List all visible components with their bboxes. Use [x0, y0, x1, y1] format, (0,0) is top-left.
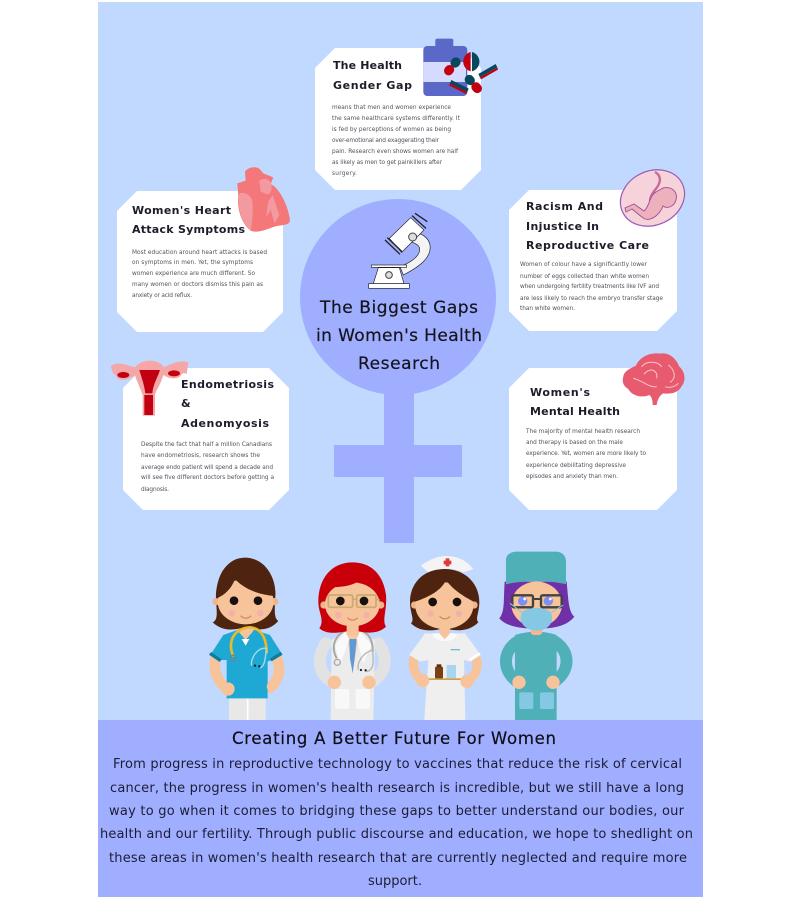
text: health gender gap body: is fed by perceptions of women as being [332, 127, 451, 133]
text: footer body: support. [368, 874, 422, 889]
text: endometriosis body: average endo patient will spend a decade and [141, 465, 273, 471]
heading: endometriosis: Endometriosis [181, 378, 274, 391]
text: mental health body: experience debilitating depressive [526, 463, 626, 469]
central female symbol [300, 199, 496, 543]
icon: brain [623, 353, 685, 405]
text: racism body: are less likely to reach the embryo transfer stage [520, 296, 663, 302]
text: mental health body [525, 429, 646, 480]
text: footer body: health and our fertility. Through public discourse and education, we hope to shedlight on [100, 827, 693, 842]
heading: central title [316, 298, 482, 374]
heading: endometriosis: & [181, 397, 191, 410]
heading: racism and injustice: Racism And [526, 200, 603, 213]
text: health gender gap body: the same healthcare systems differently. It [332, 116, 461, 122]
text: racism body: number of eggs collected than white women [520, 274, 649, 280]
text: endometriosis body: have endometriosis, research shows the [141, 453, 260, 459]
text: footer body: From progress in reproductive technology to vaccines that reduce the risk of cervical [113, 757, 682, 772]
text: mental health body: and therapy is based on the male [526, 440, 623, 446]
text: heart attack body [132, 250, 267, 299]
heading: health gender gap [333, 59, 412, 92]
panel: women's heart attack symptoms [117, 191, 283, 332]
panel: endometriosis and adenomyosis [123, 368, 289, 510]
character: nurse [409, 556, 481, 720]
heading: racism and injustice: Reproductive Care [526, 239, 649, 252]
text: footer body: cancer, the progress in women's health research is incredible, but we still have a long [110, 781, 684, 796]
icon: anatomical heart [237, 167, 290, 232]
heading: footer title: Creating A Better Future For Women [232, 729, 556, 748]
heading: health gender gap: The Health [333, 59, 402, 72]
text: endometriosis body: will see five different doctors before getting a [141, 475, 274, 481]
heading: central title: The Biggest Gaps [319, 298, 478, 318]
text: footer body: these areas in women's health research that are currently neglected and require more [109, 851, 687, 866]
text: health gender gap body: pain. Research even shows women are half [332, 149, 459, 155]
heading: heart attack symptoms: Women's Heart [132, 204, 231, 217]
page background panel [98, 2, 703, 720]
text: racism body: when undergoing fertility treatments like IVF and [520, 284, 659, 290]
panel: women's mental health [509, 368, 677, 510]
heading: heart attack symptoms: Attack Symptoms [132, 223, 245, 236]
heading: endometriosis: Adenomyosis [181, 417, 269, 430]
icon: medicine bottle and pills [423, 39, 498, 96]
panel: racism and injustice [509, 190, 677, 331]
panel: the health gender gap [315, 48, 481, 190]
icon: microscope [369, 213, 430, 288]
text: mental health body: experience. Yet, women are more likely to [526, 451, 646, 457]
heading: mental health [530, 386, 620, 418]
panel: creating a better future [98, 720, 703, 897]
text: health gender gap body: means that men and women experience [332, 105, 451, 111]
text: heart attack body: Most education around heart attacks is based [132, 250, 267, 256]
text: health gender gap body: as likely as men to get painkillers after [332, 160, 443, 166]
text: mental health body: The majority of mental health research [525, 429, 640, 435]
heading: heart attack symptoms [132, 204, 245, 236]
character: doctor in blue scrubs [210, 558, 282, 720]
text: health gender gap body: surgery. [332, 171, 357, 177]
heading: central title: in Women's Health [316, 326, 482, 346]
text: racism body: than white women. [520, 306, 575, 312]
text: footer body: way to go when it comes to bridging these gaps to better understand our bodies, our [109, 804, 685, 819]
character: doctor with red hair and white coat [318, 562, 386, 720]
heading: mental health: Mental Health [530, 405, 620, 418]
heading: central title: Research [358, 354, 440, 374]
heading: mental health: Women's [530, 386, 590, 399]
text: endometriosis body: Despite the fact that half a million Canadians [141, 442, 272, 448]
text: health gender gap body: over-emotional and exaggerating their [332, 138, 440, 144]
text: heart attack body: on symptoms in men. Yet, the symptoms [132, 260, 253, 266]
heading: health gender gap: Gender Gap [333, 79, 412, 92]
character: surgeon [499, 552, 574, 720]
text: endometriosis body: diagnosis. [141, 487, 169, 493]
text: mental health body: episodes and anxiety than men. [526, 474, 618, 480]
heading: endometriosis [181, 378, 274, 430]
text: racism body: Women of colour have a significantly lower [520, 262, 648, 268]
text: health gender gap body [332, 105, 461, 177]
text: endometriosis body [141, 442, 274, 493]
text: heart attack body: women experience are much different. So [132, 271, 255, 277]
heading: racism and injustice [526, 200, 649, 252]
heading: racism and injustice: Injustice In [526, 220, 599, 233]
text: racism body [520, 262, 663, 312]
icon: uterus [111, 361, 188, 416]
text: heart attack body: many women or doctors dismiss this pain as [132, 282, 263, 288]
icon: fetus [611, 160, 694, 236]
text: footer body [100, 757, 693, 889]
text: heart attack body: anxiety or acid reflux. [132, 293, 192, 299]
